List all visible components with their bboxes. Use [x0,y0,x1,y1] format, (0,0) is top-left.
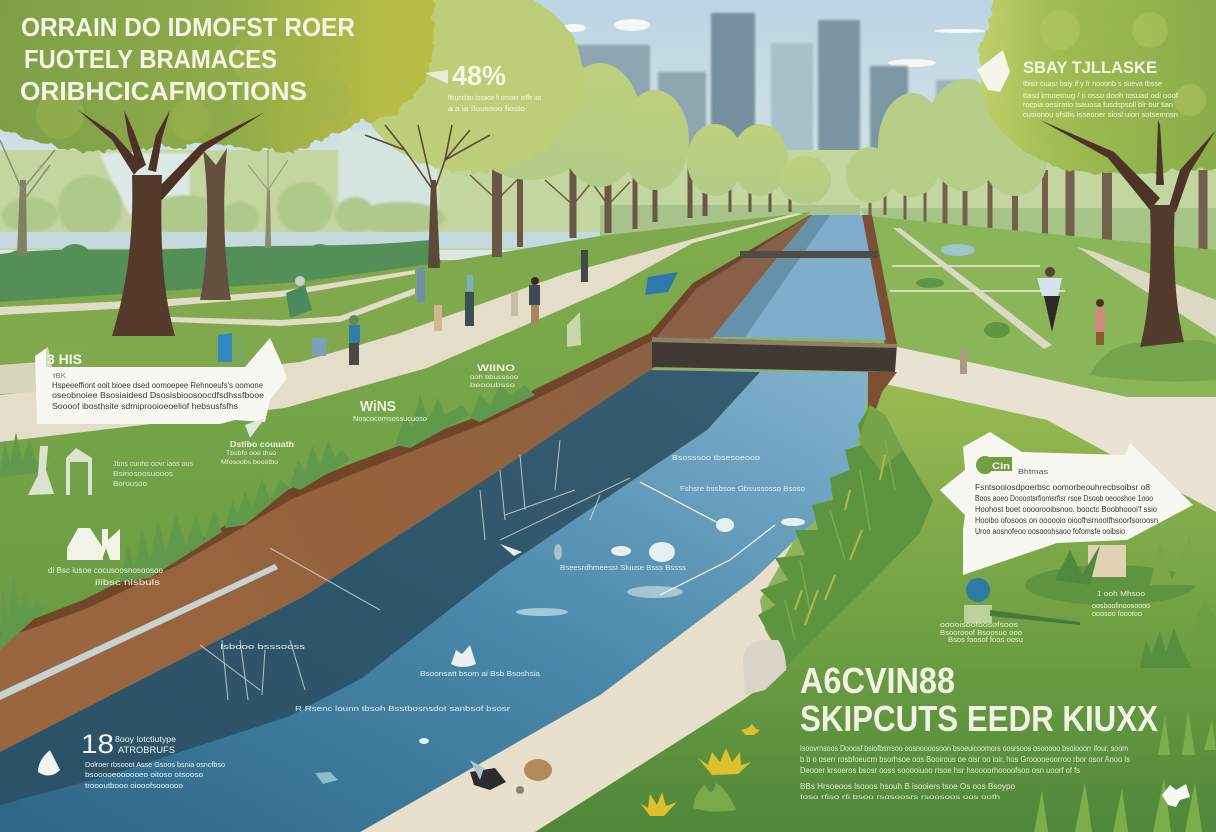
heading: bottom right: A6CVIN88 [800,660,955,701]
right lawn paths [890,228,1216,349]
callout: right arrow panel: Fsntsooiosdpoerbsc oomorbeouhrecbsoibsr o8 [975,483,1151,492]
callout: left arrow panel [35,338,287,424]
upper canal shaded edge [713,215,830,337]
callout: right arrow panel: Hoohost boet oooorooibsnoo. booctc Boobhoooi'f ssio [975,505,1158,514]
grass along bank [0,385,535,650]
small bare tree left [0,140,55,256]
text block: bottom right: Deooer krsoeros bsosr ooss sooooiuoo rtsoe hsr hsoooorhoooofsoo osn uoorf of fs [800,766,1080,775]
label: waste bag: di Bsc iusoe cocusoosnosoosoo [48,566,164,575]
distant grass band [600,205,860,240]
water debris [315,518,805,784]
label: wines top: ooh bbusssoo [470,375,519,381]
green bush [693,783,736,812]
label: mid grass: Tbsbfo ooe thso [226,451,277,457]
icon: waste bag and marker [67,528,120,560]
callout: right arrow panel: Bhtmas [1018,469,1049,476]
middle tree [356,0,584,268]
side path [0,362,40,394]
heading: bottom right [800,660,1158,739]
cream embankment [360,400,867,832]
right big tree [979,0,1216,347]
reeds in water [200,440,630,700]
label: wines top [470,363,519,389]
right bank strip [860,215,897,432]
callout: left arrow panel: Hspeeeffiont ooit bioee dsed oomoepee Rehnoeufs's oomone [52,381,264,390]
water labels: Bsosssoo tbsesoeooo [672,455,760,462]
stat: 18: Dolroer rbsooot Asse Gsoos bsnia osncfbso [85,762,225,769]
brown bank [0,215,812,752]
water [0,370,868,832]
upper canal [713,215,886,340]
stat: 48 percent: a a ia ffoussoo fiosto [448,106,525,113]
icon: leaf badge [977,50,1010,92]
label: waste bag: ilibsc nisbuls [95,578,160,587]
text block: bottom right: Ioso rfiso rfi bsoo rsosoosrs rsoosoos oos oofh [800,795,1000,801]
label: waste bag [48,566,164,587]
upper left lawn [0,212,812,372]
stat: 18: 8ooy iotctiutype [115,735,177,744]
label: mid grass: Mfosoobs boootbo [221,460,279,466]
callout: right arrow panel: Uroo aosnofeoo oosooohsaoo fofomsfe ooibsio [975,527,1125,536]
small labels right [940,591,1150,644]
text block: bottom right: BBs Hrsoeoos lsooos hsouh B isooiers tsoe Os oos Bsoypo [800,782,1016,791]
yellow flowers [640,724,760,816]
text block: bottom right [800,744,1130,801]
right lawn [868,216,1216,400]
callout: right arrow panel: Boos aoeo Dooootsrfiomsrfisr rsoe Dsoob oeooshoe 1ooo [975,494,1153,503]
small labels right: Bsos foosof foos oosu [948,637,1023,644]
heading: top left: ORRAIN DO IDMOFST ROER [21,12,355,42]
text block: grass note: Borousoo [113,481,147,488]
small labels right: oosboofinoosoooo [1092,603,1150,610]
text block: bottom right: Isoovrnsoos Dooosf bsiofbsrrsoo oosnoooosoon bsoeuicoomors oosrsoos osooooo bsoiooorr ifour, soom [800,744,1128,753]
lawn paths [0,270,415,326]
text block: bottom right: b b o oserr rosbfoeucrn bsorhsoe oos Booirous oe oisr oo ioir, hos Grooooeoorroo rbor osor Anoo Is [800,755,1130,764]
panel: top right: tbisir cuasr bsiy if y fr nooonb s sueva tbsse [1023,81,1162,88]
callout: right arrow panel [940,432,1193,575]
callout: left arrow panel: Soooof ibosthsite sdmiprooioeoeliof hebsusfsfhs [52,402,238,411]
icon: swan [38,750,60,776]
text block: grass note: Jbns cunho oovr iaos oos [113,461,193,468]
panel: top right: rocpia oesiratio tsauosa fusdspsoll blr bur tian [1023,102,1173,109]
bridge highlight [652,337,897,348]
small labels right: ooosoo foootoo [1092,611,1142,618]
stat: 18 [81,729,225,790]
icon: green badge: Cin [992,461,1010,471]
text block: grass note: Bsiriosoosuooos [113,471,174,478]
label: mid grass: Dstibo couuath [230,440,294,449]
water shadow [0,370,760,805]
stat: 48 percent: 48% [452,60,506,91]
label: win [353,398,427,423]
small labels right: 1 ooh Mhsoo [1097,591,1145,598]
left big tree [0,0,434,336]
foreground grass [1034,710,1216,832]
water labels [220,455,805,713]
panel: top right: SBAY TJLLASKE [1023,58,1157,77]
label: win: Noscocomsossucuoso [353,416,427,423]
water labels: R Rsenc lounn tbsoh Bsstbosnsdot sanbsof bsosr [295,706,511,713]
water labels: Bseesrdhmeesst Sluuse Bsss Bssss [560,565,687,572]
dark mound [1025,565,1195,605]
small labels right: ooooisoofoosofsoos [940,622,1019,629]
heading: top left: ORIBHCICAFMOTIONS [20,76,307,106]
stat: 18: ATROBRUFS [118,745,175,755]
water line to debris [640,482,775,595]
stat: 18: 18 [81,729,114,759]
lower right grass [535,383,1216,832]
city skyline [573,13,976,195]
stat: 48 percent [425,60,541,113]
stat: 18: bsooooeoooooeo oitoso otsooso [85,772,203,779]
blue tarp [645,272,678,295]
water labels: Isbooo bsssooss [220,644,306,651]
pale sign [567,312,581,347]
icon: green badge [976,456,1012,474]
small shrubs [916,278,1010,338]
pipe on bank [0,564,278,700]
pale sky gap and building left [100,130,438,215]
clouds [562,19,986,67]
water labels: Fshsre bssbsoe Gbsussosso Bsoso [680,486,805,493]
main left path [0,213,803,442]
icon: butterfly [1162,784,1190,807]
people on paths [218,250,1105,374]
icon: litter on bank [470,759,552,794]
far hazy parkland [0,150,1216,250]
callout: left arrow panel: tBK [53,373,66,380]
icon: paper boat [451,645,476,667]
right lawn tarp [941,244,975,256]
heading: top left [20,12,355,106]
stat: 18: troooutbooo oiooofsoooooo [85,783,183,790]
label: wines top: beooubsso [470,383,516,389]
panel: top right: cusionou ofstlis isseoner siosl uion sotsemnsn [1023,112,1178,119]
hedge [0,240,445,302]
callout: left arrow panel: oseobnoiee Bsosiaidesd Dsosisbioosoocdfsdhssfbooe [52,391,265,400]
right lawn bush [1090,340,1216,382]
far pale trees left [2,175,445,239]
sky [0,0,1216,260]
label: win: WiNS [360,398,396,415]
far bridge [740,251,878,258]
callout: left arrow panel: 3 HIS [47,351,82,367]
right crossing path [880,347,1216,512]
small labels right: Bsoorooof Bsoosuo ooo [940,630,1022,637]
rock [743,640,786,695]
bank top shade [0,215,810,640]
icon: figure and gate [28,446,92,495]
grass tuft near embankment [758,405,933,668]
illustration under callout [964,535,1195,625]
panel: top right [977,50,1178,119]
callout tail [245,418,265,438]
panel: top right: tlasd kmoetnug / ri osso dooh tosuad odi ooof [1023,93,1178,100]
small bare tree second [248,150,288,248]
near bridge [652,337,897,372]
right background trees [846,79,1203,290]
stat: 48 percent: fibunclao tosaoe fi omoer ioffe iot [448,95,541,102]
heading: bottom right: SKIPCUTS EEDR KIUXX [800,698,1158,739]
heading: top left: FUOTELY BRAMACES [24,44,277,74]
distant lake [0,232,600,248]
label: wines top: WIINO [477,363,515,373]
label: mid grass [221,440,294,466]
lower left grass [0,214,812,634]
grass clump right [1140,600,1216,668]
text block: grass note [113,461,193,488]
right far grass [860,208,1216,250]
water labels: Bsoonsatt bsom ai Bsb Bsoshsia [420,671,540,678]
distant pale tree row [460,50,831,257]
callout: right arrow panel: Hooibo ofosoos on oooooio oioofhsrnootfhsoorfsoroosn [975,516,1158,525]
